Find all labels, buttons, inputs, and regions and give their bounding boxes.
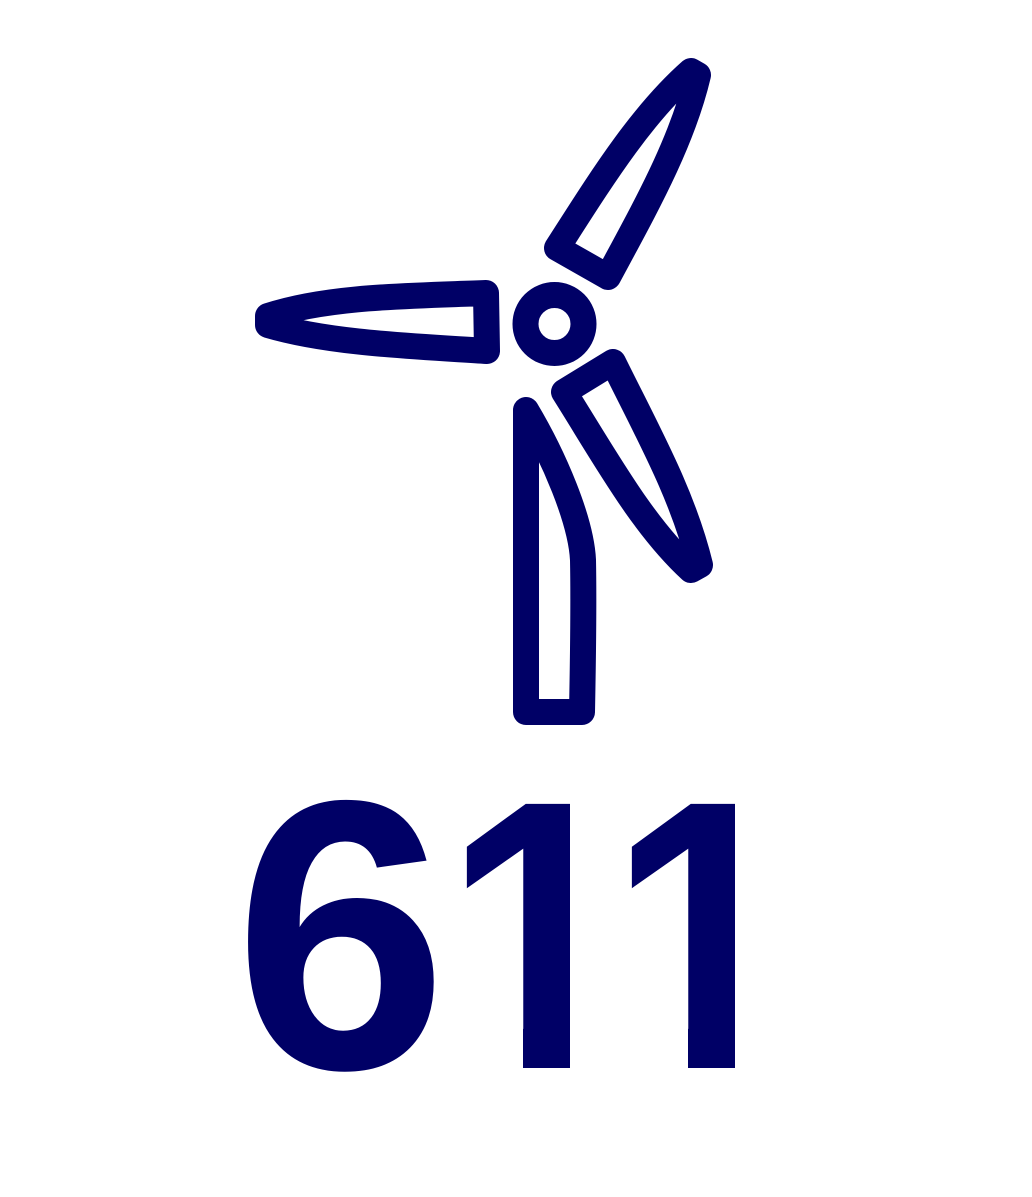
wind turbine infographic xyxy=(248,58,735,1072)
turbine hub xyxy=(526,295,584,353)
number: 611: 1 xyxy=(608,721,799,1150)
number: 611 xyxy=(248,800,735,1072)
number: 611: 1 xyxy=(444,721,634,1150)
icon: wind turbine xyxy=(268,71,700,712)
turbine tower xyxy=(526,410,583,712)
turbine blade: lower right xyxy=(564,362,700,570)
turbine blade: upper right xyxy=(557,71,698,277)
number: 611: 6 xyxy=(234,721,448,1150)
turbine blade: left xyxy=(268,293,487,351)
